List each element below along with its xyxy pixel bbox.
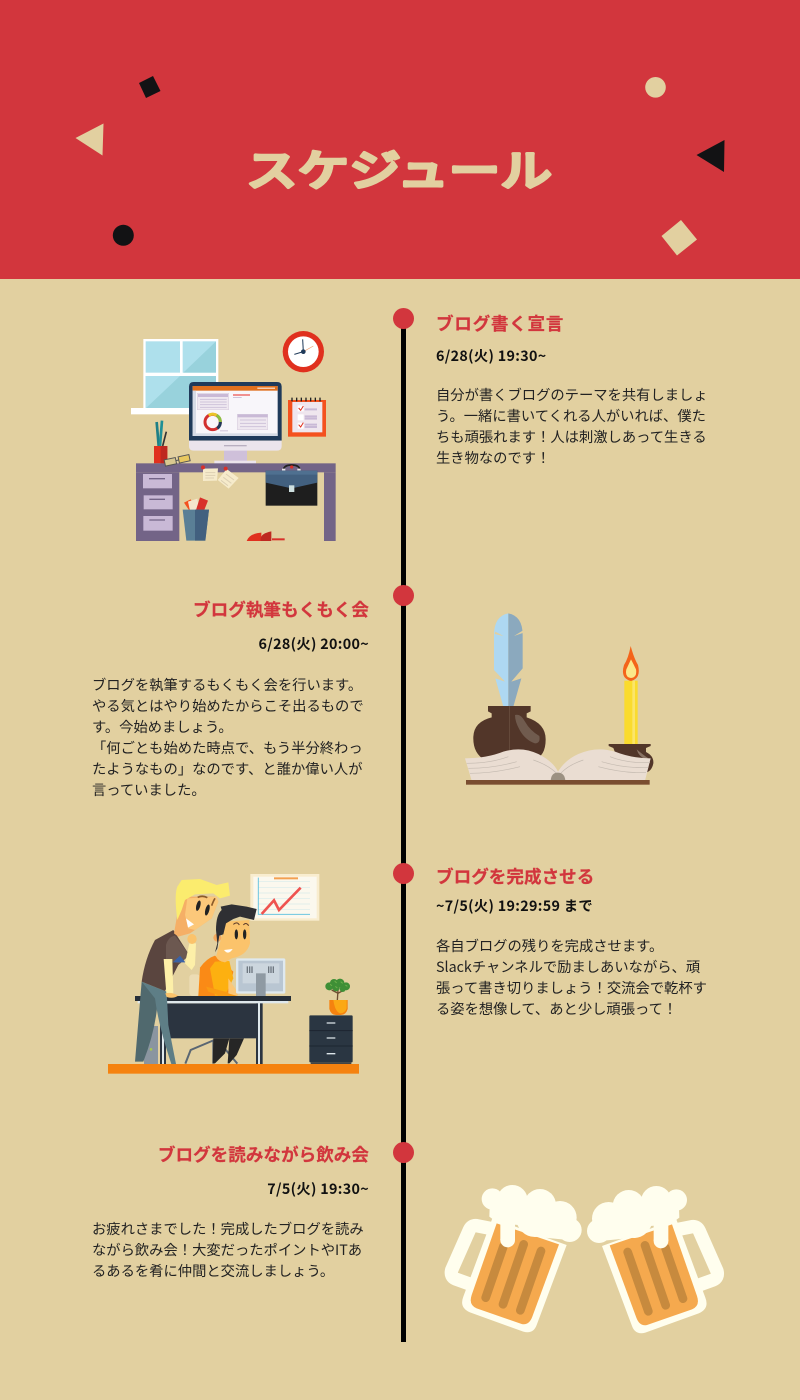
panel: blog declaration: [131, 311, 708, 541]
timeline dot 2: [392, 585, 414, 606]
computer monitor: [189, 382, 282, 464]
heading: ブログ書く宣言: [436, 311, 564, 336]
text block: [92, 674, 364, 800]
seated man: [198, 904, 257, 1063]
quill: [494, 613, 523, 707]
chair: [185, 974, 237, 1064]
text block: やる気とはやり始めたからこそ出るもので: [92, 695, 364, 716]
text block: る姿を想像して、あと少し頑張って！: [436, 998, 677, 1019]
ink bottle: [473, 706, 546, 760]
file cabinet: [309, 1015, 353, 1064]
floor: [108, 1064, 359, 1074]
panel: writing meetup: [92, 597, 654, 800]
open book: [465, 749, 651, 785]
text block: す。今始めましょう。: [92, 716, 233, 737]
desktop monitor: [236, 958, 285, 997]
heading: ブログ執筆もくもく会: [193, 597, 369, 622]
slippers: [247, 531, 285, 541]
waste bin: [183, 497, 209, 541]
text block: ちも頑張れます！人は刺激しあって生きる: [436, 426, 707, 447]
standing man: [135, 879, 230, 1064]
text block: 言っていました。: [92, 779, 206, 800]
briefcase: [266, 465, 317, 506]
date: ~7/5(火) 19:29:59 まで: [436, 895, 593, 916]
icon: beige triangle: [76, 124, 104, 156]
icon: beige diamond: [662, 220, 697, 256]
timeline dot 1: [392, 308, 414, 329]
window: [131, 339, 218, 414]
header banner: [0, 0, 800, 279]
text block: う。一緒に書いてくれる人がいれば、僕た: [436, 405, 706, 426]
text block: [436, 384, 708, 468]
text block: 各自ブログの残りを完成させます。: [436, 935, 663, 956]
date: 6/28(火) 19:30~: [436, 345, 546, 366]
desk: [135, 996, 291, 1064]
date: 7/5(火) 19:30~: [267, 1178, 369, 1199]
text block: [92, 1218, 364, 1281]
icon: black circle: [113, 225, 134, 246]
illustration: two people at a computer: [108, 874, 359, 1074]
timeline dot 4: [392, 1142, 414, 1162]
calendar: [288, 398, 326, 437]
icon: black triangle: [696, 140, 724, 172]
sticky notes and desk: [136, 463, 336, 541]
glasses: [164, 455, 190, 466]
timeline dot 3: [392, 863, 414, 884]
text block: 生き物なのです！: [436, 447, 550, 468]
illustration: beer mugs: [444, 1185, 724, 1334]
text block: ブログを執筆するもくもく会を行います。: [92, 674, 362, 695]
text block: Slackチャンネルで励ましあいながら、頑: [436, 956, 700, 977]
text block: るあるを肴に仲間と交流しましょう。: [92, 1260, 334, 1281]
heading: ブログを読みながら飲み会: [158, 1142, 369, 1167]
left mug: [451, 1185, 582, 1332]
candle: [623, 646, 639, 744]
text block: お疲れさまでした！完成したブログを読み: [92, 1218, 364, 1239]
panel: reading and drinks: [92, 1142, 724, 1334]
text block: [436, 935, 707, 1019]
date: 6/28(火) 20:00~: [258, 633, 369, 654]
text block: 「何ごとも始めた時点で、もう半分終わっ: [92, 737, 363, 758]
text block: たようなもの」なのです、と誰か偉い人が: [92, 758, 362, 779]
candle holder: [609, 744, 653, 773]
illustration: office desk: [131, 331, 336, 541]
pencil cup: [154, 421, 167, 463]
heading: ブログを完成させる: [436, 864, 594, 889]
text block: 張って書き切りましょう！交流会で乾杯す: [436, 977, 707, 998]
clock: [283, 331, 324, 372]
timeline line: [401, 320, 406, 1342]
icon: beige circle: [645, 77, 666, 98]
right mug: [587, 1186, 717, 1333]
computer tower: [144, 1026, 158, 1064]
icon: black diamond: [139, 76, 160, 98]
potted plant: [325, 979, 350, 1015]
text block: 自分が書くブログのテーマを共有しましょ: [436, 384, 708, 405]
illustration: book, quill and candle: [465, 613, 654, 785]
title: スケジュール: [246, 137, 552, 199]
text block: ながら飲み会！大変だったポイントやITあ: [92, 1239, 362, 1260]
panel: finish blog: [108, 864, 707, 1074]
wall chart: [250, 874, 319, 921]
